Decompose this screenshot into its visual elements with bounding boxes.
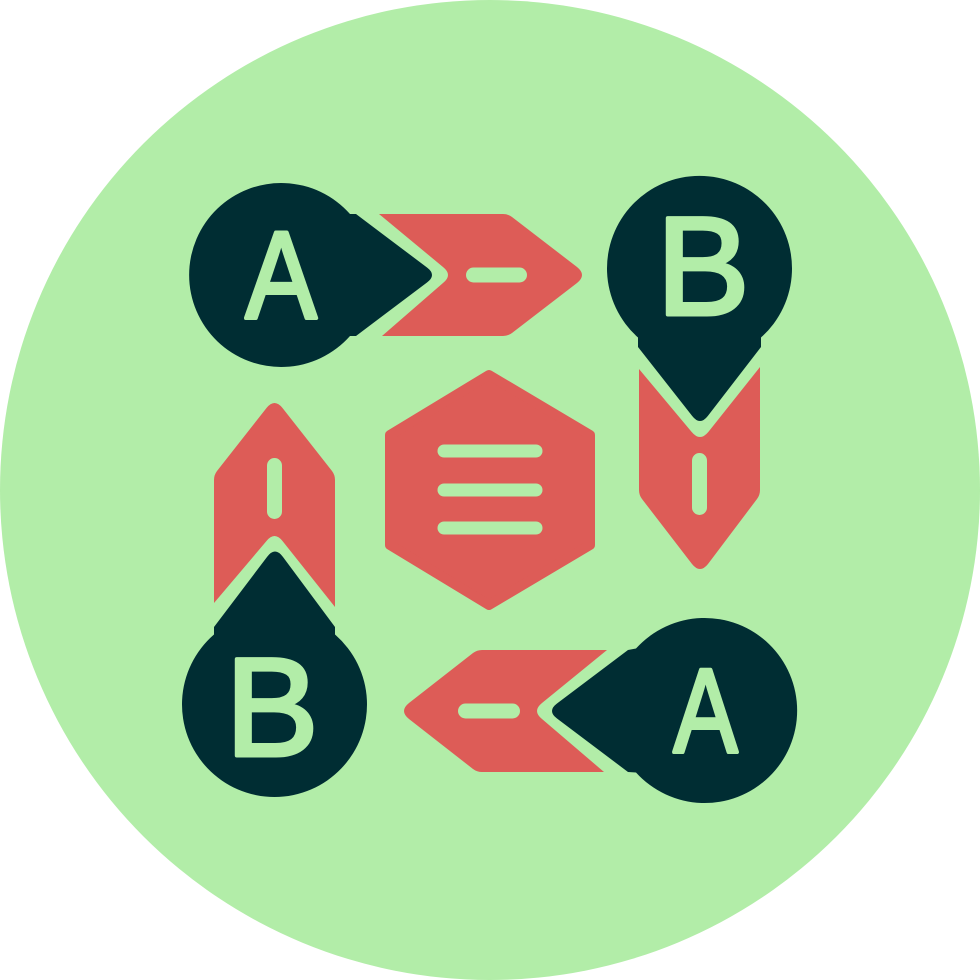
letter A: A [673, 645, 738, 779]
right arrow: B to A [639, 367, 760, 569]
left arrow: B to A [214, 403, 335, 607]
pin B top right [607, 176, 792, 421]
letter B: B [225, 628, 319, 786]
letter B: B [656, 188, 750, 344]
pin A top left [189, 183, 432, 367]
pin B bottom left [182, 552, 367, 797]
bottom arrow: A to B [404, 650, 607, 772]
pin A bottom right [552, 618, 797, 803]
center hexagon menu icon [390, 375, 590, 605]
letter A: A [245, 205, 317, 345]
top arrow: A to B [379, 214, 582, 336]
